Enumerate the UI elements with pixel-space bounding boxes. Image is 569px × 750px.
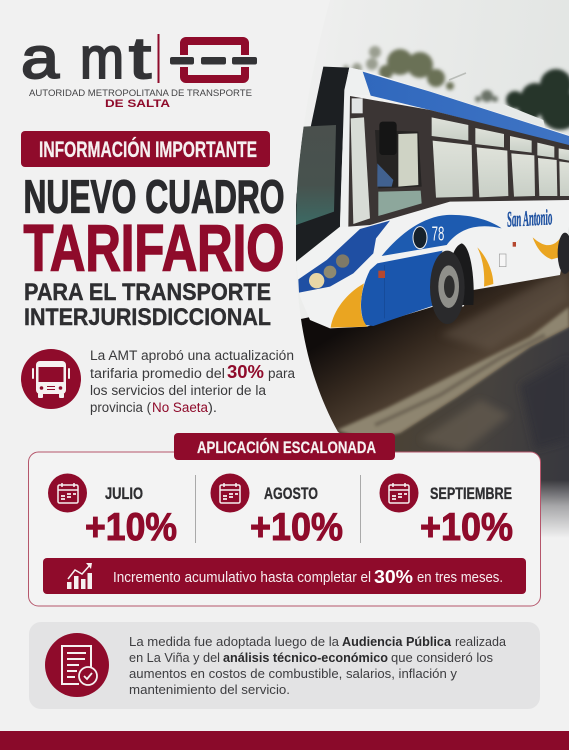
intro text: tarifaria promedio del bbox=[90, 366, 225, 381]
note text: análisis técnico-económico bbox=[223, 650, 388, 665]
band: incremento acumulativo: 30% bbox=[374, 567, 413, 587]
photo: San Antonio bus on wet street bbox=[290, 0, 569, 570]
icon: document check bbox=[45, 633, 109, 697]
intro text: No Saeta bbox=[152, 400, 208, 415]
driver window bbox=[375, 130, 422, 188]
blue lower panel bbox=[361, 251, 443, 326]
title: TARIFARIO bbox=[24, 212, 284, 284]
logo letters: a bbox=[21, 26, 60, 91]
month: agosto bbox=[210, 474, 343, 549]
note text: La medida fue adoptada luego de la bbox=[129, 634, 340, 649]
logo letters: t bbox=[129, 26, 151, 91]
month: septiembre: +10% bbox=[420, 506, 513, 549]
logo letters: m bbox=[80, 26, 124, 91]
badge: información importante bbox=[21, 131, 270, 167]
headlights bbox=[309, 273, 324, 288]
bottom bar bbox=[0, 731, 569, 750]
white pillar bbox=[340, 68, 360, 225]
logo AMT: AUTORIDAD METROPOLITANA DE TRANSPORTE bbox=[29, 88, 252, 99]
note text: aumentos en costos de combustible, salarios, inflación y bbox=[129, 666, 458, 681]
panel heading: APLICACIÓN ESCALONADA bbox=[197, 438, 376, 457]
intro text: para bbox=[268, 366, 295, 381]
note text: Audiencia Pública bbox=[342, 634, 452, 649]
passenger windows bbox=[432, 117, 569, 198]
panel: nota de audiencia pública bbox=[29, 622, 540, 709]
badge: información importante: INFORMACIÓN IMPORTANTE bbox=[39, 137, 257, 162]
title: PARA EL TRANSPORTE bbox=[24, 279, 271, 306]
trees bbox=[343, 46, 569, 130]
intro text: La AMT aprobó una actualización bbox=[90, 348, 294, 363]
intro text: ). bbox=[208, 400, 217, 415]
icon: bus bbox=[21, 349, 81, 409]
title: NUEVO CUADRO bbox=[24, 170, 284, 222]
note text: que consideró los bbox=[391, 650, 493, 665]
front windshield bbox=[296, 67, 349, 262]
blue side swoosh bbox=[382, 215, 502, 256]
month: septiembre: SEPTIEMBRE bbox=[430, 484, 512, 503]
window band bbox=[348, 96, 569, 227]
intro text: provincia ( bbox=[90, 400, 151, 415]
logo letters bbox=[21, 26, 151, 91]
yellow front corner bbox=[331, 283, 367, 328]
logo mark bbox=[170, 41, 258, 79]
logo AMT bbox=[21, 26, 258, 110]
month: agosto: +10% bbox=[250, 506, 343, 549]
ground bbox=[301, 270, 569, 434]
side front window bbox=[351, 117, 370, 224]
door hatch bbox=[499, 254, 506, 267]
panel heading bbox=[174, 433, 395, 460]
month: julio: +10% bbox=[85, 506, 177, 549]
month: julio: JULIO bbox=[105, 484, 143, 503]
bus number: 78 bbox=[432, 224, 444, 246]
icon: rising chart bbox=[67, 563, 92, 589]
AC unit bbox=[504, 104, 545, 127]
band: incremento acumulativo bbox=[43, 558, 526, 594]
mirror bbox=[379, 122, 397, 155]
photo fade bbox=[541, 482, 569, 538]
month: septiembre bbox=[380, 474, 513, 549]
note text: realizada bbox=[455, 634, 507, 649]
title bbox=[24, 170, 284, 331]
rear wheel bbox=[558, 233, 569, 274]
month: julio bbox=[48, 474, 177, 549]
title: INTERJURISDICCIONAL bbox=[24, 304, 271, 331]
note text: mantenimiento del servicio. bbox=[129, 682, 290, 697]
intro text bbox=[90, 348, 295, 415]
asphalt beyond curb bbox=[394, 327, 569, 520]
fuel hole bbox=[413, 227, 427, 249]
logo AMT: DE SALTA bbox=[105, 98, 170, 110]
intro text: los servicios del interior de la bbox=[90, 383, 266, 398]
yellow side marks bbox=[477, 247, 493, 287]
note text bbox=[129, 634, 507, 697]
intro text: 30% bbox=[227, 362, 264, 382]
note text: en La Viña y del bbox=[129, 650, 220, 665]
panel: aplicación escalonada bbox=[28, 433, 540, 606]
band: incremento acumulativo: Incremento acumulativo hasta completar el bbox=[113, 570, 371, 586]
front wheel bbox=[453, 243, 474, 305]
blue front stripe bbox=[298, 221, 390, 293]
blue roof bbox=[363, 72, 569, 146]
bus bbox=[296, 67, 569, 328]
band: incremento acumulativo: en tres meses. bbox=[417, 570, 503, 586]
curb bbox=[337, 307, 569, 440]
month: agosto: AGOSTO bbox=[264, 484, 318, 503]
bus body bbox=[296, 67, 569, 328]
